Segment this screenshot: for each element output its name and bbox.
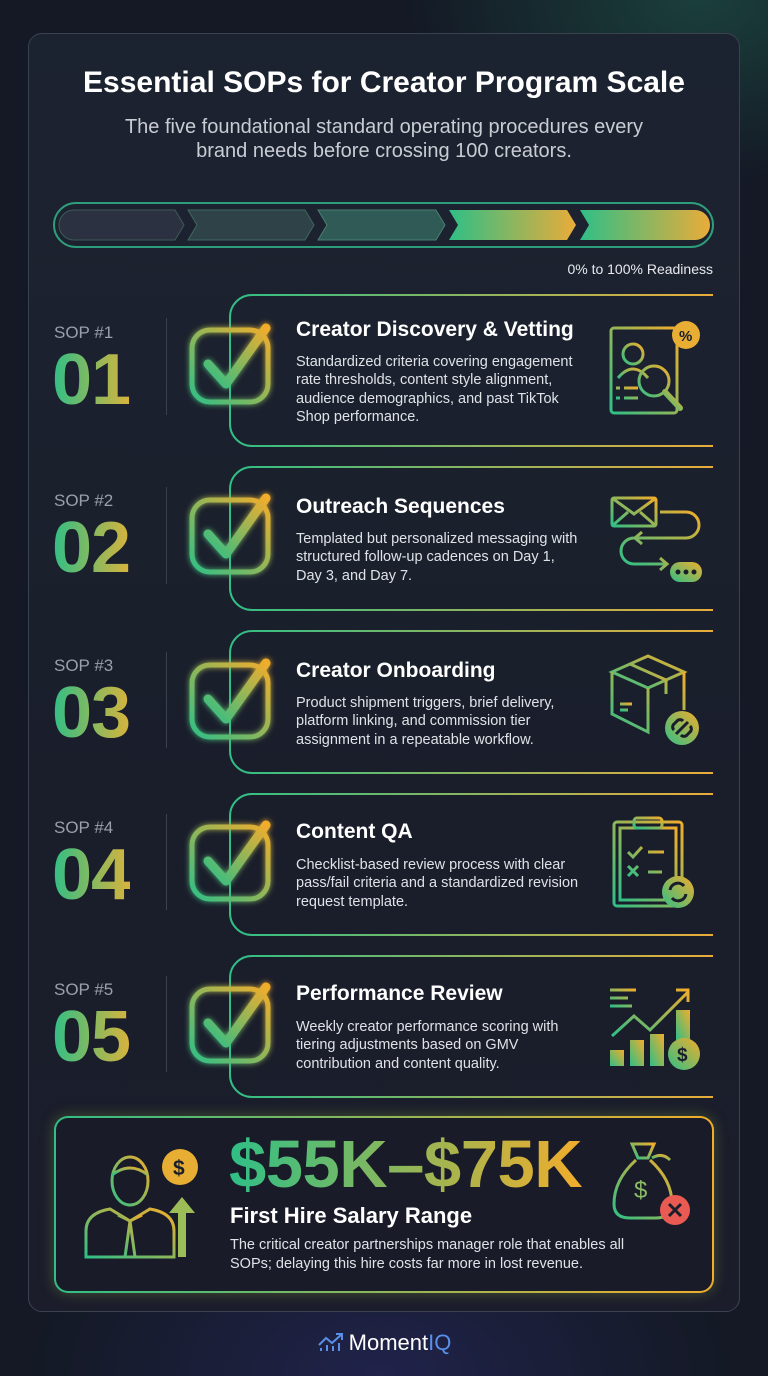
SOP 5 description: Weekly creator performance scoring with tiering adjustments based on GMV contribution and content quality.	[296, 1019, 558, 1072]
title: Essential SOPs for Creator Program Scale	[83, 66, 685, 99]
SOP 1 check icon	[185, 320, 275, 409]
SOP 5 number: 05	[52, 997, 130, 1077]
icon: person with salary: $	[173, 1157, 185, 1180]
SOP 4 icon: clipboard	[612, 816, 694, 908]
SOP 3 label: SOP #3	[54, 656, 113, 675]
SOP 1 label: SOP #1	[54, 323, 113, 342]
salary figure: $55K–$75K	[229, 1127, 582, 1202]
SOP 2 icon: outreach flow	[610, 496, 702, 582]
subtitle: brand needs before crossing 100 creators.	[196, 140, 572, 162]
SOP 1 icon: profile search: %	[679, 328, 692, 345]
salary label: First Hire Salary Range	[230, 1203, 472, 1228]
SOP 2 label: SOP #2	[54, 491, 113, 510]
subtitle: The five foundational standard operating procedures every	[125, 116, 643, 138]
SOP 2 description: Templated but personalized messaging with structured follow-up cadences on Day 1, Day 3, and Day 7.	[296, 531, 577, 584]
icon: person with salary	[84, 1149, 198, 1258]
subtitle	[125, 116, 643, 162]
SOP 2 title: Outreach Sequences	[296, 495, 505, 518]
SOP 5 icon: growth chart: $	[677, 1045, 688, 1066]
SOP 3 icon: box with link	[608, 654, 699, 745]
SOP 4 title: Content QA	[296, 820, 413, 843]
SOP 5 icon: growth chart	[610, 988, 700, 1070]
icon: money bag with x	[612, 1142, 690, 1225]
SOP 1 icon: profile search	[610, 321, 700, 414]
icon: money bag with x: $	[634, 1177, 647, 1204]
salary description: The critical creator partnerships manager role that enables all SOPs; delaying this hire costs far more in lost revenue.	[230, 1237, 624, 1272]
SOP 3 number: 03	[52, 673, 130, 753]
SOP 4 label: SOP #4	[54, 818, 113, 837]
SOP 3 title: Creator Onboarding	[296, 659, 496, 682]
SOP 4	[229, 793, 713, 936]
SOP 3 description: Product shipment triggers, brief delivery, platform linking, and commission tier assignment in a repeatable workflow.	[296, 695, 554, 748]
SOP 1 number: 01	[52, 340, 130, 420]
SOP 4 number: 04	[52, 835, 130, 915]
SOP 1 title: Creator Discovery & Vetting	[296, 318, 574, 341]
SOP 2 check icon	[185, 490, 275, 579]
SOP 1 description: Standardized criteria covering engagement rate thresholds, content style alignment, audience demographics, and past TikTok Shop performance.	[296, 354, 572, 425]
SOP 1	[229, 294, 713, 447]
SOP 5 title: Performance Review	[296, 982, 503, 1005]
SOP 5 check icon	[185, 978, 275, 1068]
SOP 3 check icon	[185, 654, 275, 744]
readiness label: 0% to 100% Readiness	[567, 261, 713, 277]
SOP 2	[229, 466, 713, 611]
SOP 4 description: Checklist-based review process with clear pass/fail criteria and a standardized revision request template.	[296, 857, 578, 910]
SOP 5 label: SOP #5	[54, 980, 113, 999]
progress bar	[53, 202, 714, 248]
salary panel	[54, 1116, 714, 1293]
SOP 3	[229, 630, 713, 774]
SOP 2 number: 02	[52, 508, 130, 588]
SOP 5	[229, 955, 713, 1098]
SOP 4 check icon	[185, 816, 275, 906]
logo: MomentIQ	[349, 1330, 451, 1355]
